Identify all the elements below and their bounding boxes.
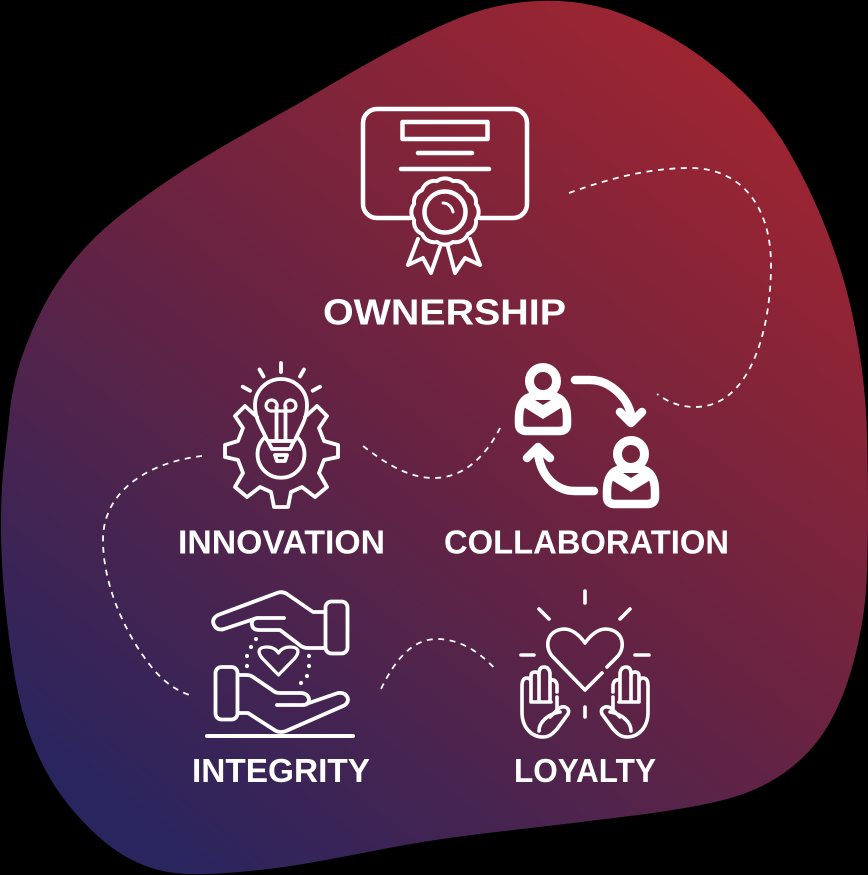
person top left	[519, 368, 567, 431]
heading: collaboration: COLLABORATION	[444, 524, 729, 560]
icon: two people exchanging	[519, 368, 655, 504]
dashed connector: ownership to collaboration	[569, 168, 771, 407]
dashed connector: innovation to integrity	[103, 456, 202, 696]
icon: light bulb in gear	[225, 363, 338, 507]
heading: integrity: INTEGRITY	[192, 752, 370, 789]
icon: raised hands with heart	[521, 591, 649, 737]
icon: hands protecting heart	[207, 592, 353, 736]
dashed connector: collaboration to innovation	[363, 428, 500, 478]
icon: certificate with rosette	[363, 109, 527, 273]
left hand	[522, 667, 569, 737]
person bottom right	[607, 440, 655, 504]
arrow top	[575, 380, 642, 423]
dashed connector: integrity to loyalty	[381, 639, 497, 689]
heading: ownership: OWNERSHIP	[323, 292, 566, 332]
arrow bottom	[527, 447, 594, 491]
right hand	[601, 667, 648, 737]
heading: loyalty: LOYALTY	[514, 752, 656, 789]
heading: innovation: INNOVATION	[178, 524, 385, 560]
